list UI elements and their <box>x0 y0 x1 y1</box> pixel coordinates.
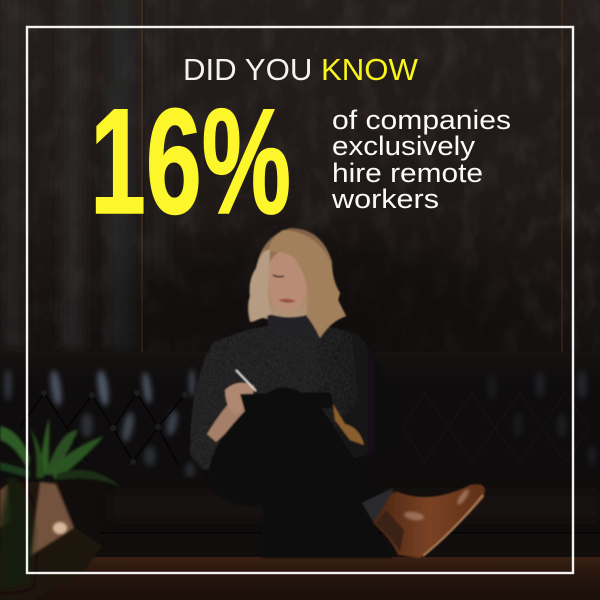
copper pot <box>0 482 102 600</box>
turtleneck collar <box>267 312 318 334</box>
tablet <box>240 392 335 412</box>
statistic description <box>331 105 511 214</box>
statistic description: of companies <box>332 105 511 135</box>
woman seated on sofa <box>185 228 485 558</box>
face <box>267 248 307 314</box>
guitar glimpse <box>333 404 364 445</box>
statistic description: hire remote <box>332 158 483 188</box>
statistic description: workers <box>331 184 439 214</box>
trailing ivy <box>0 475 34 590</box>
hand with stylus <box>225 383 254 415</box>
eyes and lips <box>273 275 284 277</box>
chelsea boot <box>373 484 485 558</box>
sock <box>362 488 393 523</box>
forearm <box>207 400 246 442</box>
potted plant <box>0 418 122 600</box>
statistic description: exclusively <box>332 131 476 161</box>
hair front lock <box>268 230 346 338</box>
wooden floor <box>0 557 600 600</box>
leather chesterfield sofa <box>0 352 600 557</box>
sweater <box>190 326 378 471</box>
heading: did you know: DID YOU KNOW <box>183 52 419 87</box>
sofa seat <box>0 478 600 557</box>
black trousers <box>207 387 385 522</box>
tufting seams <box>20 393 185 465</box>
leaves <box>0 418 122 488</box>
big statistic: 16% <box>90 77 291 245</box>
hair back with waves <box>248 228 346 336</box>
leather highlights <box>4 369 596 478</box>
tuft buttons <box>41 390 188 465</box>
